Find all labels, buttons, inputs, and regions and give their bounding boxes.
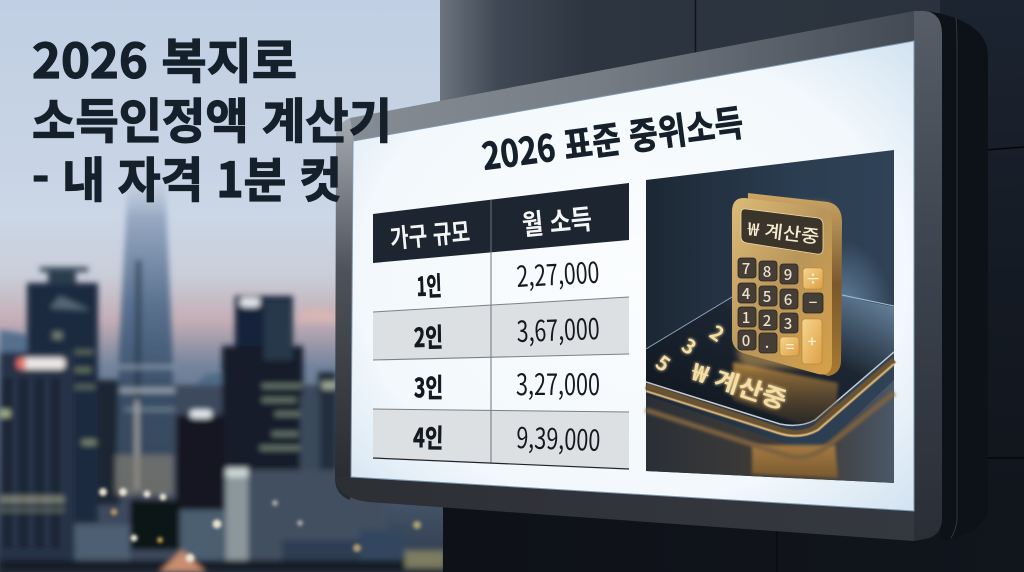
frame top rail <box>336 11 914 160</box>
keypad: 3 <box>784 313 792 334</box>
backdrop glow <box>790 240 894 390</box>
title line 1: 2026 복지로 <box>32 22 297 92</box>
keypad: = <box>786 336 794 357</box>
keypad <box>738 258 823 364</box>
row 2 value: 3,67,000 <box>516 306 600 351</box>
frame right rail <box>914 11 942 541</box>
keypad: . <box>765 332 769 353</box>
panel: display frame <box>335 11 988 541</box>
header: monthly income: 월 소득 <box>520 198 594 244</box>
picture: gold calculator on glowing tablet <box>646 150 894 483</box>
frame side depth <box>925 11 988 541</box>
calculator display <box>741 209 823 254</box>
calculator reflection <box>733 362 838 424</box>
keypad: 2 <box>763 310 771 331</box>
keypad: 4 <box>742 283 751 304</box>
lower reflection zone <box>646 380 894 483</box>
frame bottom rail <box>335 476 914 541</box>
tablet gold edge <box>646 352 894 425</box>
keypad: − <box>809 292 817 313</box>
table header <box>373 183 629 263</box>
table row 2 shading <box>373 297 629 360</box>
tablet surface <box>646 297 894 425</box>
title line 3: - 내 자격 1분 컷 <box>32 141 342 211</box>
glow text: numbers on surface: 3 <box>677 330 703 361</box>
dark wall behind the panel <box>440 0 1024 572</box>
keypad: 1 <box>742 307 750 328</box>
title line 2: 소득인정액 계산기 <box>32 82 392 152</box>
calculator body glow <box>738 203 836 368</box>
row 4 value: 9,39,000 <box>516 415 601 460</box>
row 3 value: 3,27,000 <box>516 362 600 404</box>
keypad: 5 <box>763 286 771 307</box>
keypad: 8 <box>763 261 771 282</box>
row 3 label: 3인 <box>414 368 443 405</box>
calculator <box>732 193 842 376</box>
header: household size: 가구 규모 <box>388 212 471 256</box>
keypad: ÷ <box>805 268 821 289</box>
keypad: 9 <box>784 264 792 285</box>
keypad: + <box>808 331 816 352</box>
keypad: 6 <box>784 289 792 310</box>
row 2 label: 2인 <box>413 317 443 355</box>
calculator side <box>745 193 842 376</box>
keypad: 0 <box>742 330 750 351</box>
title <box>32 22 392 211</box>
background: blurred city skyline <box>0 0 445 572</box>
gold reflection below tablet <box>752 445 838 478</box>
row 1 label: 1인 <box>416 266 442 304</box>
table <box>373 183 629 469</box>
panel: lit screen <box>351 41 914 511</box>
glow text: numbers on surface: 2 <box>705 317 731 348</box>
screen heading: 2026 표준 중위소득 <box>478 93 746 181</box>
row 1 value: 2,27,000 <box>515 250 600 296</box>
frame left rail <box>335 118 354 500</box>
row 4 label: 4인 <box>413 418 444 456</box>
keypad: 7 <box>742 258 750 279</box>
glow text: numbers on surface: ₩ 계산중 <box>687 352 792 416</box>
calculator display: ₩ 계산중 <box>745 215 821 249</box>
glow text: numbers on surface <box>651 317 792 416</box>
calculator front <box>732 198 832 374</box>
table row 4 shading <box>373 409 629 469</box>
glow text: numbers on surface: 5 <box>651 347 677 378</box>
